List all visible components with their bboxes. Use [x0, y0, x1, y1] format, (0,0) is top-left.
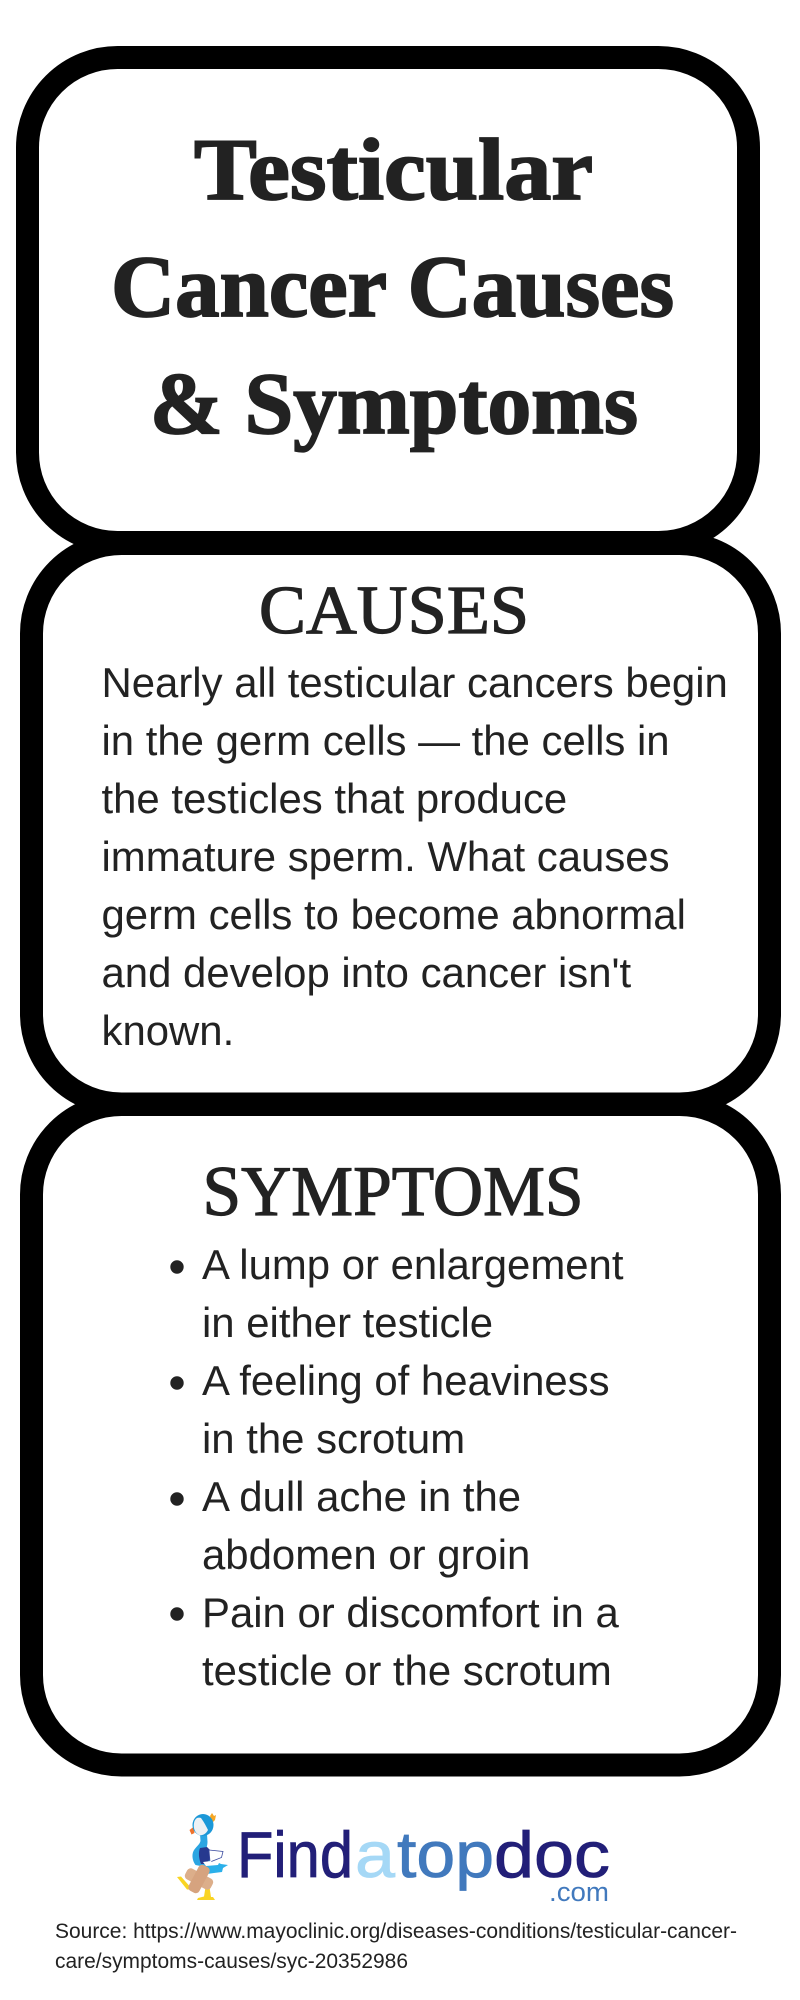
causes body text: and develop into cancer isn't — [102, 949, 632, 996]
causes heading: CAUSES — [259, 572, 529, 648]
panel: symptoms — [32, 1104, 770, 1765]
causes body text: the testicles that produce — [102, 775, 567, 822]
causes body text: in the germ cells — the cells in — [102, 717, 670, 764]
symptoms bullet list: in either testicle — [202, 1299, 493, 1346]
symptoms bullet list: Pain or discomfort in a — [202, 1589, 619, 1636]
logo .com: .com — [549, 1877, 609, 1907]
title heading: Testicular — [194, 122, 593, 219]
source citation: care/symptoms-causes/syc-20352986 — [55, 1950, 408, 1973]
logo wordmark: a — [355, 1818, 396, 1891]
causes body text: Nearly all testicular cancers begin — [102, 659, 728, 706]
logo wordmark — [237, 1818, 610, 1891]
panel: title — [28, 58, 748, 542]
title heading — [111, 122, 674, 453]
symptoms bullet list: A dull ache in the — [202, 1473, 521, 1520]
causes body text: germ cells to become abnormal — [102, 891, 686, 938]
icon: duck mascot — [177, 1813, 228, 1900]
panel: causes — [32, 544, 770, 1104]
logo wordmark: doc — [494, 1818, 610, 1891]
symptoms bullet list: A feeling of heaviness — [202, 1357, 610, 1404]
title heading: Cancer Causes — [111, 239, 674, 336]
title heading: & Symptoms — [150, 356, 638, 453]
logo wordmark: top — [397, 1818, 494, 1891]
source citation — [55, 1920, 737, 1973]
causes body text — [102, 659, 728, 1054]
symptoms bullet list: testicle or the scrotum — [202, 1647, 612, 1694]
symptoms bullet list: A lump or enlargement — [202, 1241, 624, 1288]
source citation: Source: https://www.mayoclinic.org/diseases-conditions/testicular-cancer- — [55, 1920, 737, 1943]
symptoms heading: SYMPTOMS — [202, 1153, 584, 1231]
symptoms bullet list — [170, 1241, 624, 1694]
causes body text: immature sperm. What causes — [102, 833, 670, 880]
logo: Findatopdoc — [177, 1813, 610, 1907]
logo wordmark: Find — [237, 1818, 353, 1891]
symptoms bullet list: in the scrotum — [202, 1415, 465, 1462]
symptoms bullet list: abdomen or groin — [202, 1531, 530, 1578]
causes body text: known. — [102, 1007, 234, 1054]
